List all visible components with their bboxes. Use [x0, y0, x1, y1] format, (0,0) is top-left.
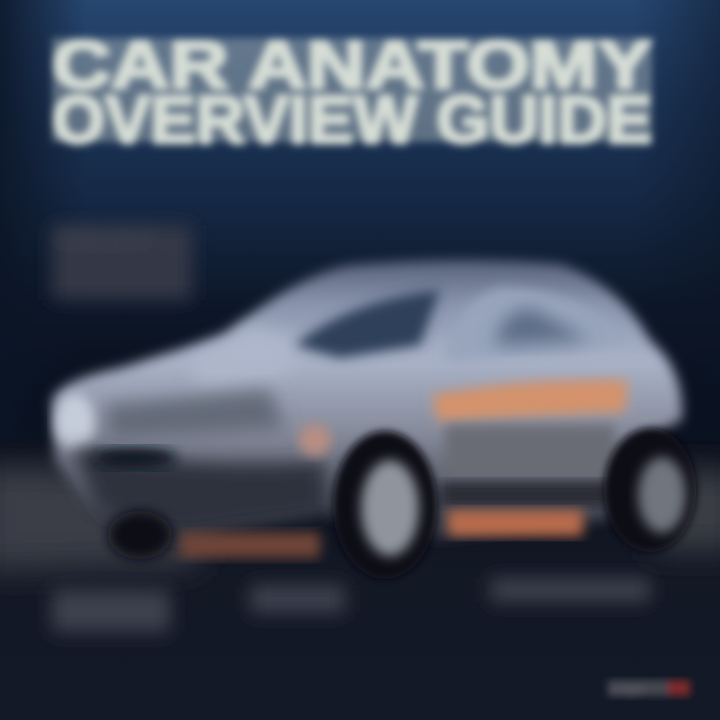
- text block: left callout: [52, 225, 192, 300]
- title: CAR ANATOMY: [52, 27, 652, 103]
- car: [52, 260, 696, 579]
- ground band: [0, 465, 720, 570]
- title: OVERVIEW GUIDE: [52, 82, 652, 158]
- front bumper accent: [180, 532, 320, 558]
- rear side window: [445, 288, 628, 362]
- windshield: [295, 290, 440, 358]
- caption labels: [52, 578, 650, 632]
- front-left wheel: [108, 511, 172, 559]
- text block: left callout: Body panel: [55, 227, 152, 247]
- title: [52, 27, 652, 158]
- front wheel: [333, 431, 437, 579]
- orange sill: [448, 510, 583, 536]
- orange door band: [432, 380, 628, 422]
- caption: lower right: [490, 578, 650, 602]
- car body: [52, 260, 682, 540]
- rocker shadow: [440, 482, 610, 506]
- caption: lower left: [52, 590, 170, 632]
- grille and bumper: [70, 445, 325, 535]
- caption: lower middle: [250, 585, 345, 613]
- rear wheel: [604, 428, 696, 552]
- logo mark: [608, 680, 690, 697]
- lower door panel: [445, 425, 615, 477]
- logo mark: Logo: [610, 681, 644, 697]
- hood highlight: [190, 325, 300, 385]
- headlight: [55, 394, 95, 450]
